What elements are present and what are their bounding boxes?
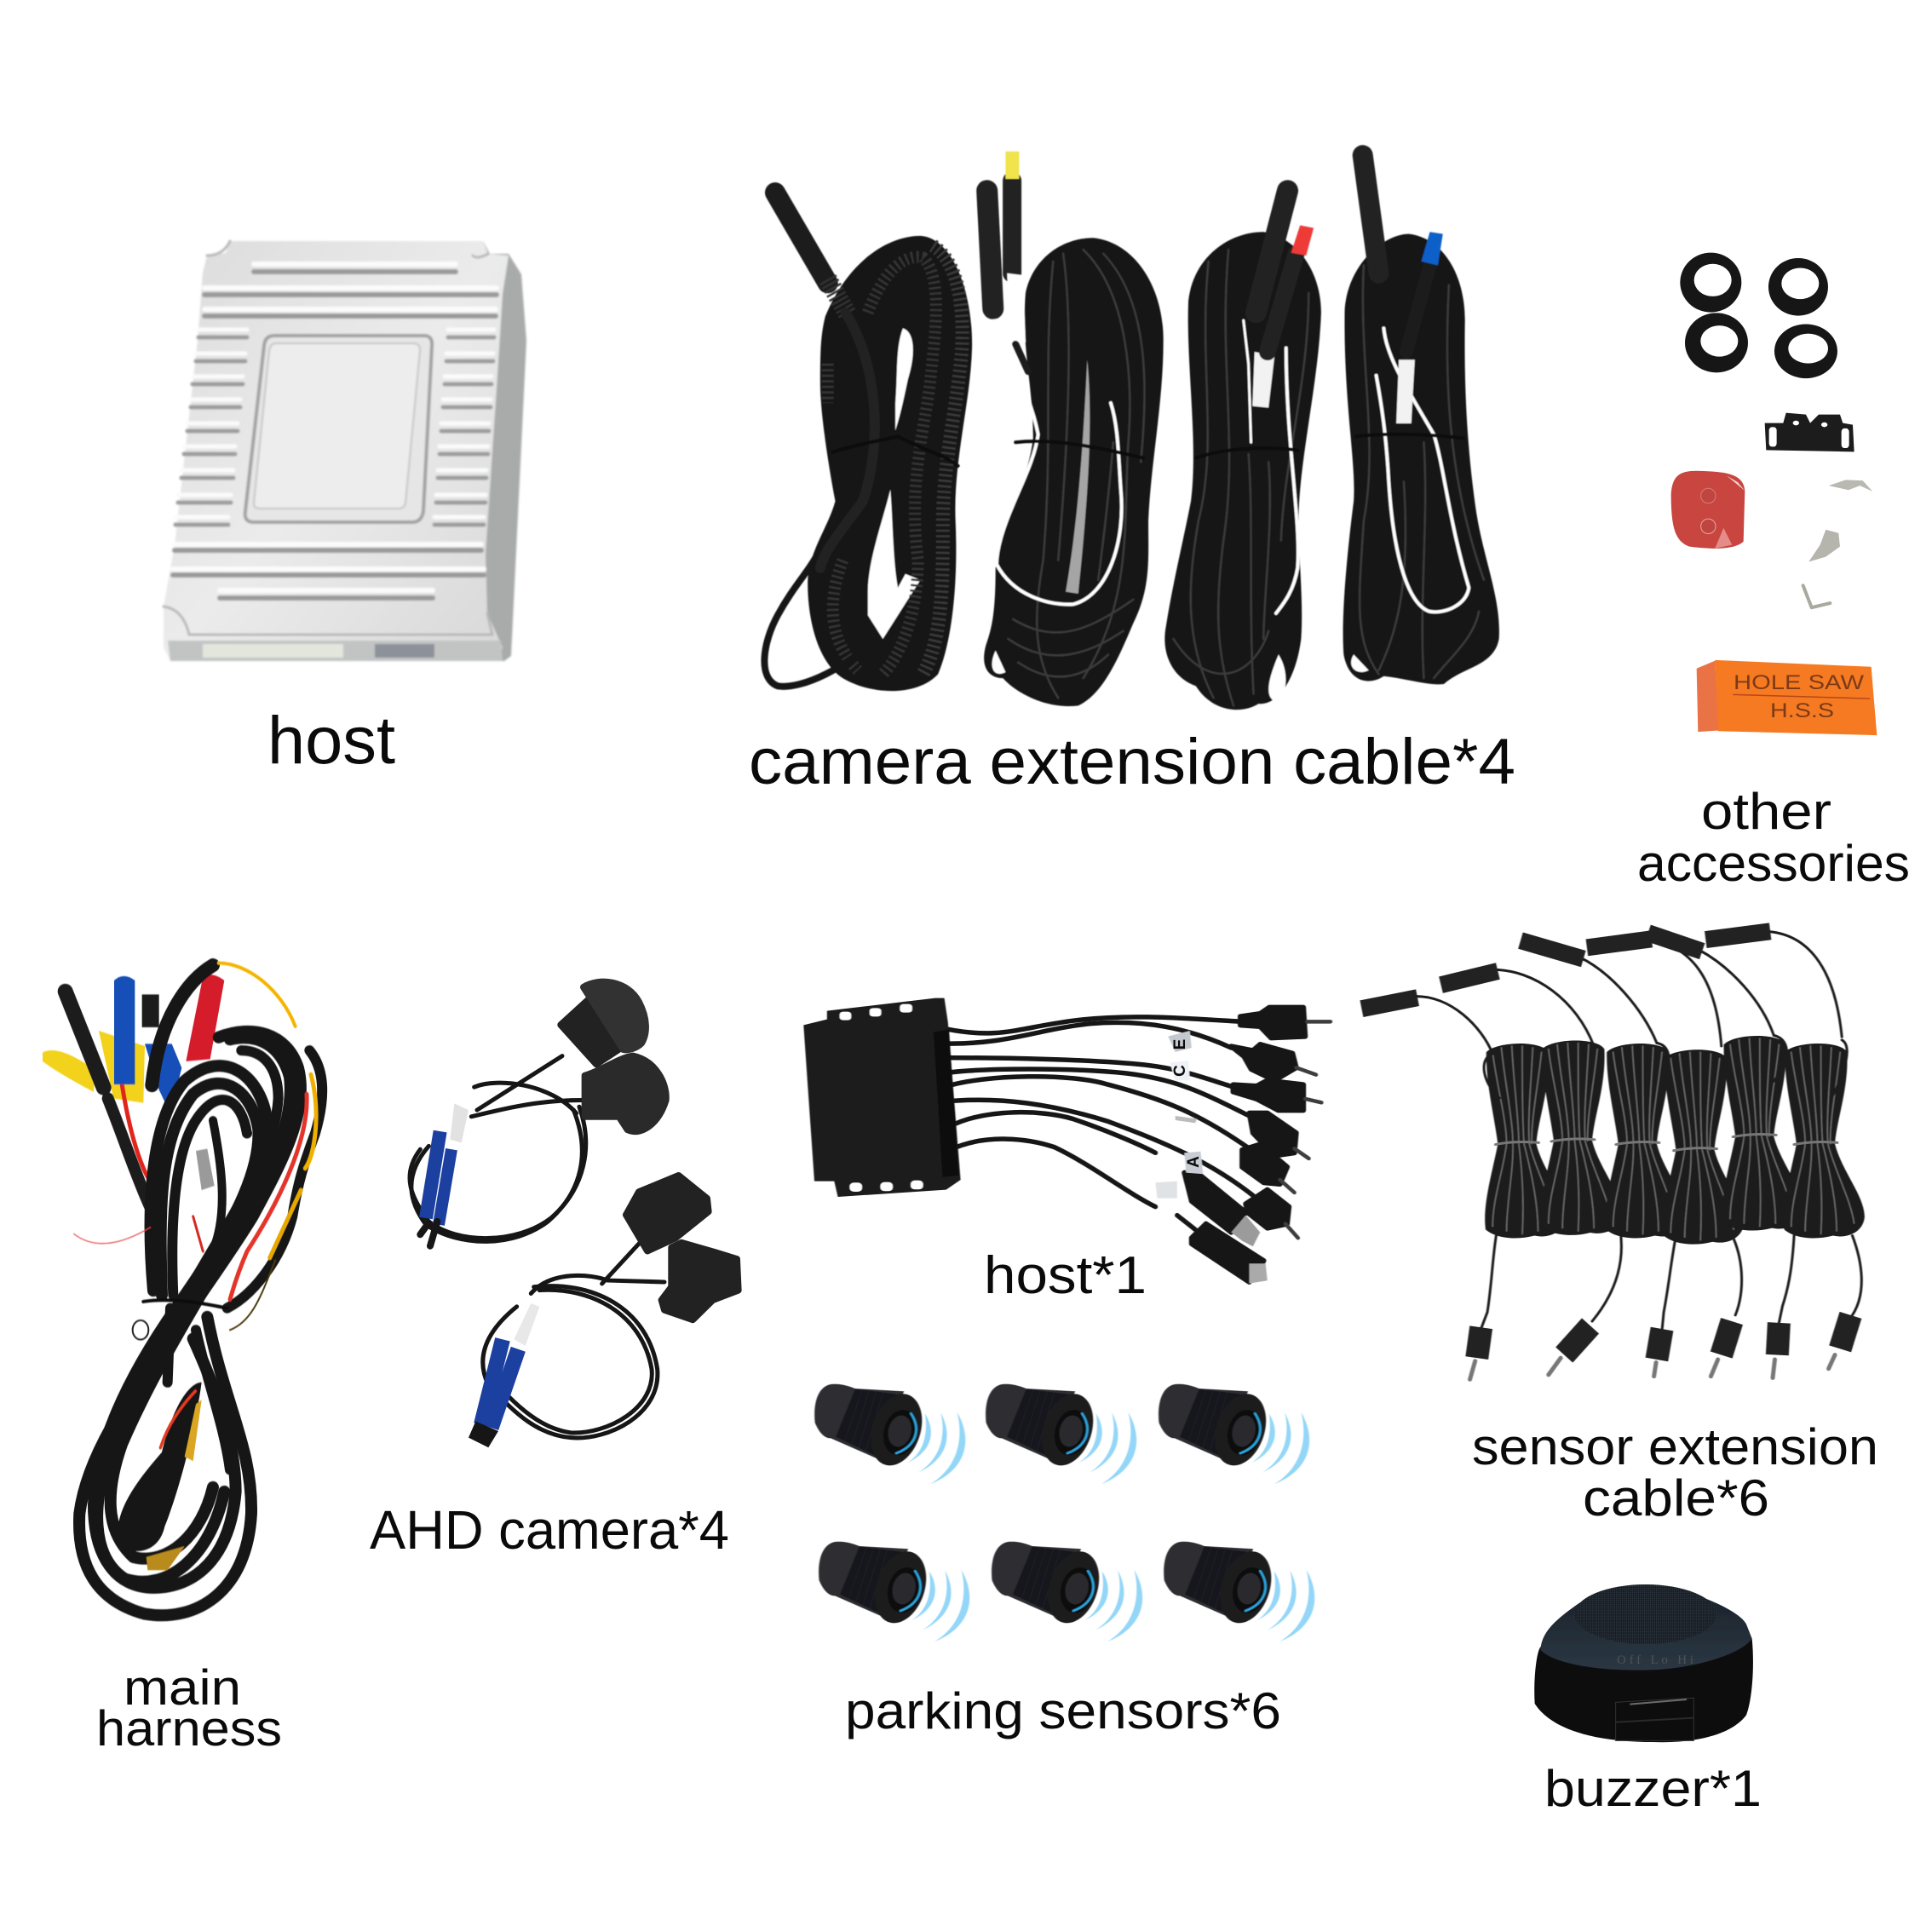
icon: sensor 2 (986, 1384, 1136, 1484)
tag letter C: C (1171, 1065, 1189, 1077)
cable 4: blue tip (1343, 155, 1499, 684)
buzzer switch legend: Off Lo Hi (1617, 1653, 1693, 1667)
label: host*1: host*1 (984, 1246, 1147, 1305)
panel: other accessories (1671, 253, 1877, 735)
icon: corner notches (164, 241, 492, 635)
label: cable*6: cable*6 (1583, 1469, 1769, 1527)
cable bundles (1485, 1036, 1865, 1245)
tag letter E: E (1171, 1039, 1189, 1049)
label: other: other (1701, 783, 1831, 840)
label: AHD camera: AHD camera*4 (370, 1499, 729, 1561)
icon: sensor 1 (814, 1384, 965, 1484)
icon: rubber grommets, bracket, adhesive pad and terminals (1671, 253, 1877, 735)
hole saw label text: HOLE SAW (1734, 671, 1864, 694)
icon: sensor 3 (1159, 1384, 1309, 1484)
panel: camera extension cables (764, 152, 1499, 710)
label: host: host (267, 702, 395, 778)
top connectors (1361, 931, 1842, 1054)
panel: parking sensors (814, 1384, 1314, 1642)
panel: AHD cameras (410, 982, 739, 1447)
label: main: main (124, 1660, 241, 1716)
label: harness: harness (96, 1701, 282, 1757)
label: parking sensors: parking sensors*6 (845, 1682, 1281, 1739)
label: buzzer*1: buzzer*1 (1544, 1760, 1762, 1817)
icon: sensor 5 (992, 1542, 1142, 1642)
panel: sensor extension cables (1361, 931, 1865, 1379)
icon: top and bottom fins (173, 264, 497, 598)
wire loom (79, 965, 322, 1615)
cable 1: coiled (764, 193, 972, 691)
label: sensor extension: sensor extension (1472, 1418, 1878, 1475)
icon: sensor 6 (1164, 1542, 1314, 1642)
panel: buzzer (1534, 1584, 1753, 1742)
panel: main harness (43, 963, 322, 1615)
cable 2: yellow tip (984, 152, 1164, 706)
icon: centre plate (245, 336, 432, 522)
label: camera extension cable: camera extension cable*4 (749, 726, 1515, 798)
tag letter A: A (1185, 1156, 1203, 1168)
panel: silver host unit (164, 241, 526, 661)
label: accessories: accessories (1637, 835, 1910, 892)
icon: side fins (175, 330, 494, 525)
bottom plugs (1470, 1217, 1861, 1379)
cable 3: red tip (1164, 191, 1321, 710)
hole saw H.S.S text: H.S.S (1770, 699, 1834, 722)
panel: black host with leads (803, 998, 1331, 1284)
icon: sensor 4 (819, 1542, 969, 1642)
wire loops at bundle tops (1484, 1035, 1847, 1098)
